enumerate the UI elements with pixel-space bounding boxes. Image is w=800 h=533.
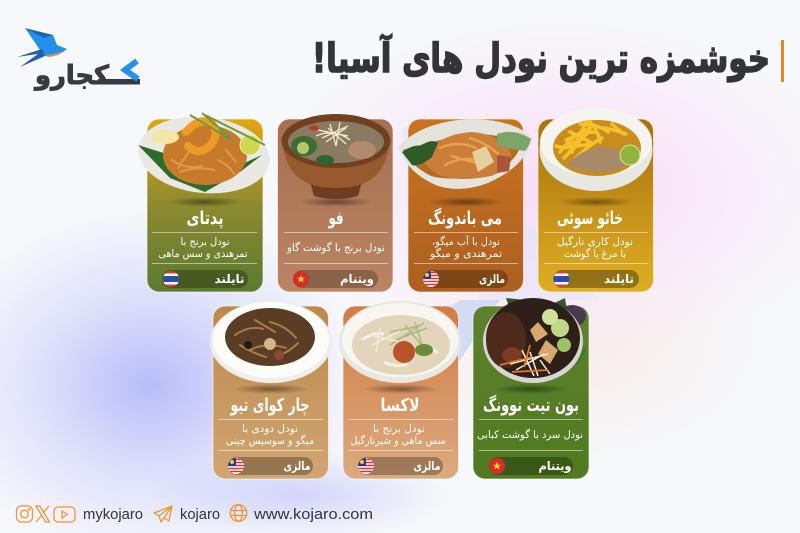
icon: logo chevron <box>125 61 138 79</box>
country pill: Malaysia: مالزی <box>414 459 440 473</box>
card: laksa <box>339 301 461 479</box>
logo baseline stroke <box>98 79 140 84</box>
website: www.kojaro.com <box>253 506 373 523</box>
card: char kway teow <box>210 301 332 479</box>
card: pho <box>278 114 393 292</box>
description <box>350 423 446 447</box>
description: تمرهندی و سس ماهی <box>158 248 248 260</box>
icon: youtube <box>54 507 75 522</box>
card: mi bandung <box>398 119 532 292</box>
description: نودل با آب میگو، <box>432 235 500 248</box>
country pill: Thailand <box>553 270 639 288</box>
name: پدتای <box>186 208 224 229</box>
card: bun thit nuong <box>473 298 589 479</box>
name: لاکسا <box>380 395 420 416</box>
dish: khao soi bowl <box>540 108 652 191</box>
logo wordmark: کجارو <box>33 61 110 91</box>
card: khao soi <box>538 108 654 292</box>
description: تمرهندی و میگو <box>429 247 502 260</box>
country pill: Vietnam: ویتنام <box>538 459 572 474</box>
icon: globe <box>230 505 247 521</box>
description <box>226 423 314 447</box>
description <box>158 236 248 260</box>
country pill: Vietnam <box>293 270 378 288</box>
description: نودل کاری نارگیل <box>557 235 633 248</box>
country pill: Malaysia: مالزی <box>479 272 505 286</box>
country pill: Vietnam <box>489 457 573 475</box>
dish: pho wooden bowl <box>282 114 390 199</box>
name: چار کوای تیو <box>230 395 310 416</box>
description <box>429 235 502 260</box>
country pill: Vietnam: ویتنام <box>340 272 374 287</box>
description: با مرغ یا گوشت <box>564 247 626 260</box>
title accent bar <box>781 40 784 82</box>
handle: kojaro: kojaro <box>180 506 220 523</box>
description: میگو و سوسیس چینی <box>226 434 314 447</box>
description: نودل برنج با گوشت گاو <box>286 241 385 254</box>
description <box>557 235 633 260</box>
country pill: Malaysia <box>358 457 443 475</box>
description: نودل برنج با <box>373 423 425 435</box>
icon: instagram <box>16 506 32 522</box>
footer: social links <box>16 505 373 523</box>
icon: X <box>36 506 50 522</box>
name: خائو سوئی <box>557 208 623 229</box>
dish: bun thit nuong bowl <box>483 298 586 383</box>
country pill: Malaysia: مالزی <box>284 459 310 473</box>
description: نودل برنج با <box>180 236 230 248</box>
country pill: Malaysia <box>228 457 313 475</box>
dish: laksa bowl <box>339 301 461 383</box>
name: فو <box>328 208 344 229</box>
country pill: Thailand: تایلند <box>604 272 634 286</box>
handle: mykojaro: mykojaro <box>83 506 143 523</box>
icon: telegram <box>154 506 172 522</box>
country pill: Thailand <box>162 270 248 288</box>
description: سس ماهی و شیرنارگیل <box>350 434 446 447</box>
country pill: Thailand: تایلند <box>214 272 244 286</box>
card: pad thai <box>134 110 274 292</box>
country pill: Malaysia <box>423 270 508 288</box>
dish: char kway teow plate <box>210 301 332 383</box>
logo: kojaro <box>17 28 140 91</box>
description: نودل دودی با <box>242 423 298 435</box>
name: می باندونگ <box>428 207 502 229</box>
name: بون تیت نوونگ <box>483 394 579 416</box>
description: نودل سرد با گوشت کبابی <box>477 428 583 441</box>
dish: pad thai plate <box>134 110 274 200</box>
dish: mi bandung plate <box>398 119 532 189</box>
icon: swallow bird <box>17 28 67 67</box>
background shapes <box>400 115 600 430</box>
